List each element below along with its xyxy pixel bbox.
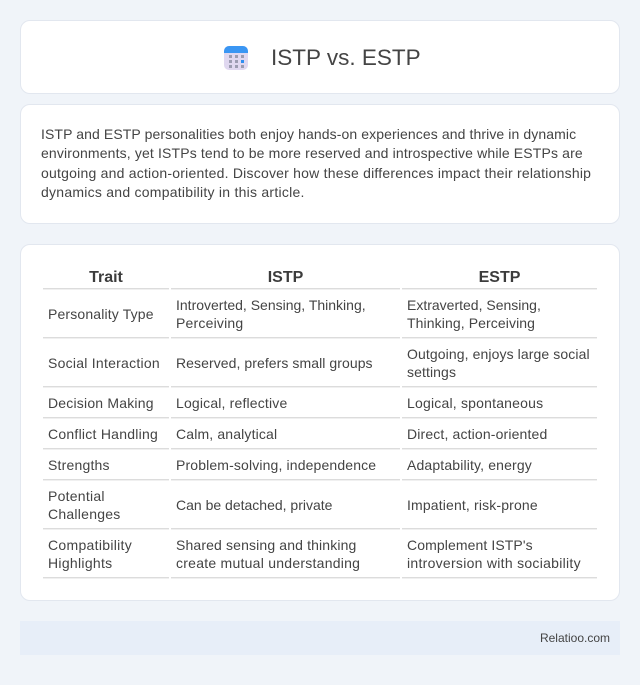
row: Potential Challenges: Potential	[48, 488, 105, 504]
row: Compatibility Highlights: Highlights	[48, 555, 112, 571]
table header: ISTP: ISTP	[268, 269, 303, 286]
intro text: dynamics and compatibility in this article.	[41, 184, 305, 200]
ISTP social: Reserved, prefers small groups	[176, 355, 373, 371]
intro text: environments, yet ISTPs tend to be more reserved and introspective while ESTPs are	[41, 145, 583, 161]
row: Conflict Handling: Conflict Handling	[48, 426, 158, 442]
ISTP conflict: Calm, analytical	[176, 426, 277, 442]
row: Potential Challenges	[48, 488, 121, 522]
ESTP strengths: Adaptability, energy	[407, 457, 532, 473]
intro text: ISTP and ESTP personalities both enjoy hands-on experiences and thrive in dynamic	[41, 126, 576, 142]
ESTP social: Outgoing, enjoys large social	[407, 346, 590, 362]
ESTP personality: Extraverted, Sensing,	[407, 297, 541, 313]
intro text	[41, 126, 591, 200]
ESTP compatibility: Complement ISTP's	[407, 537, 533, 553]
ISTP compatibility: Shared sensing and thinking	[176, 537, 356, 553]
row: Social Interaction: Social Interaction	[48, 355, 160, 371]
ESTP compatibility	[407, 537, 581, 571]
ESTP compatibility: introversion with sociability	[407, 555, 581, 571]
row: Compatibility Highlights: Compatibility	[48, 537, 132, 553]
footer	[20, 621, 620, 655]
ESTP personality	[407, 297, 541, 331]
ISTP personality	[176, 297, 366, 331]
row: Strengths: Strengths	[48, 457, 110, 473]
ISTP decision: Logical, reflective	[176, 395, 287, 411]
table header: Trait: Trait	[89, 269, 123, 286]
ISTP personality: Introverted, Sensing, Thinking,	[176, 297, 366, 313]
ISTP compatibility: create mutual understanding	[176, 555, 360, 571]
ESTP challenges: Impatient, risk-prone	[407, 497, 538, 513]
icon: calendar	[224, 46, 248, 70]
ESTP conflict: Direct, action-oriented	[407, 426, 547, 442]
ISTP challenges: Can be detached, private	[176, 497, 332, 513]
ISTP strengths: Problem-solving, independence	[176, 457, 376, 473]
title card	[20, 20, 620, 94]
row: Compatibility Highlights	[48, 537, 132, 571]
row: Potential Challenges: Challenges	[48, 506, 121, 522]
table header: ESTP: ESTP	[479, 269, 520, 286]
ISTP compatibility	[176, 537, 360, 571]
footer text: Relatioo.com	[540, 631, 610, 645]
ESTP social: settings	[407, 364, 456, 380]
panel: comparison table	[20, 244, 620, 601]
intro text: outgoing and action-oriented. Discover how these differences impact their relationship	[41, 165, 591, 181]
row: Decision Making: Decision Making	[48, 395, 154, 411]
intro panel	[20, 104, 620, 224]
ESTP personality: Thinking, Perceiving	[407, 315, 535, 331]
ESTP decision: Logical, spontaneous	[407, 395, 543, 411]
title: ISTP vs. ESTP	[271, 45, 421, 70]
row: Personality Type: Personality Type	[48, 306, 154, 322]
ISTP personality: Perceiving	[176, 315, 243, 331]
ESTP social	[407, 346, 590, 380]
